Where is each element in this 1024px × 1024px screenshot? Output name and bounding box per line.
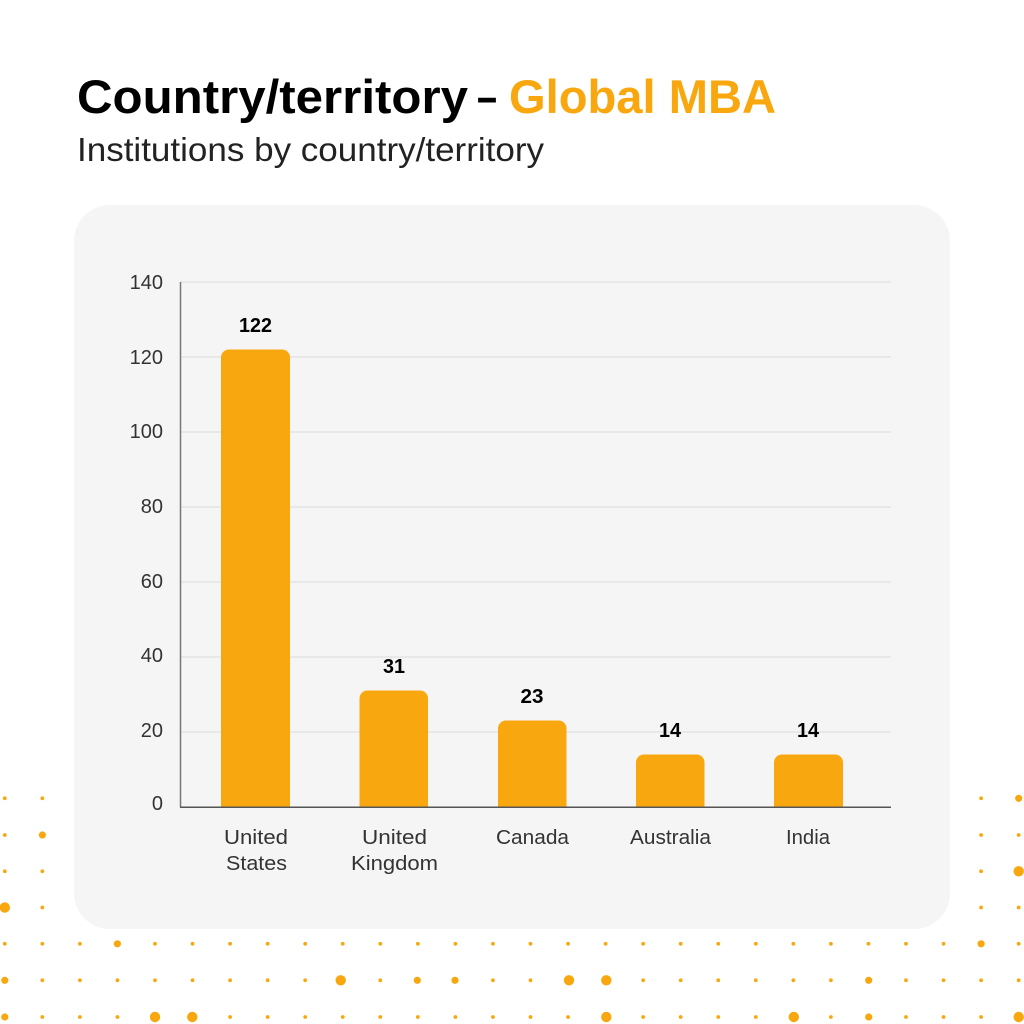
value labels: 14: [659, 720, 682, 742]
title: –: [477, 70, 497, 123]
panel: chart background: [74, 205, 950, 929]
y-axis tick labels: 60: [141, 571, 163, 593]
x-axis category labels: India: [786, 826, 831, 849]
y-axis tick labels: 140: [130, 272, 163, 294]
x-axis category labels: United: [362, 826, 427, 849]
x-axis category labels: States: [226, 852, 287, 875]
value labels: 122: [239, 315, 272, 337]
y-axis tick labels: 100: [130, 421, 163, 443]
axes: [180, 282, 891, 807]
value labels: 31: [383, 656, 405, 678]
title: Global MBA: [509, 70, 776, 123]
title: [77, 70, 776, 123]
title: Country/territory: [77, 70, 468, 123]
x-axis category labels: Kingdom: [351, 852, 438, 875]
bars: [221, 350, 843, 807]
subtitle: Institutions by country/territory: [77, 131, 545, 168]
bar chart: [130, 272, 891, 875]
y-axis tick labels: 20: [141, 720, 163, 742]
y-axis tick labels: 0: [152, 793, 163, 815]
value labels: [239, 315, 820, 742]
x-axis category labels: [224, 826, 831, 875]
y-axis tick labels: 120: [130, 347, 163, 369]
value labels: 23: [520, 686, 544, 708]
x-axis category labels: Canada: [496, 826, 570, 849]
y-axis tick labels: 80: [141, 496, 163, 518]
x-axis category labels: United: [224, 826, 288, 849]
value labels: 14: [797, 720, 820, 742]
background dot pattern: [0, 795, 1024, 1022]
x-axis category labels: Australia: [630, 826, 712, 849]
y-axis tick labels: 40: [141, 645, 163, 667]
y-axis tick labels: [130, 272, 163, 815]
